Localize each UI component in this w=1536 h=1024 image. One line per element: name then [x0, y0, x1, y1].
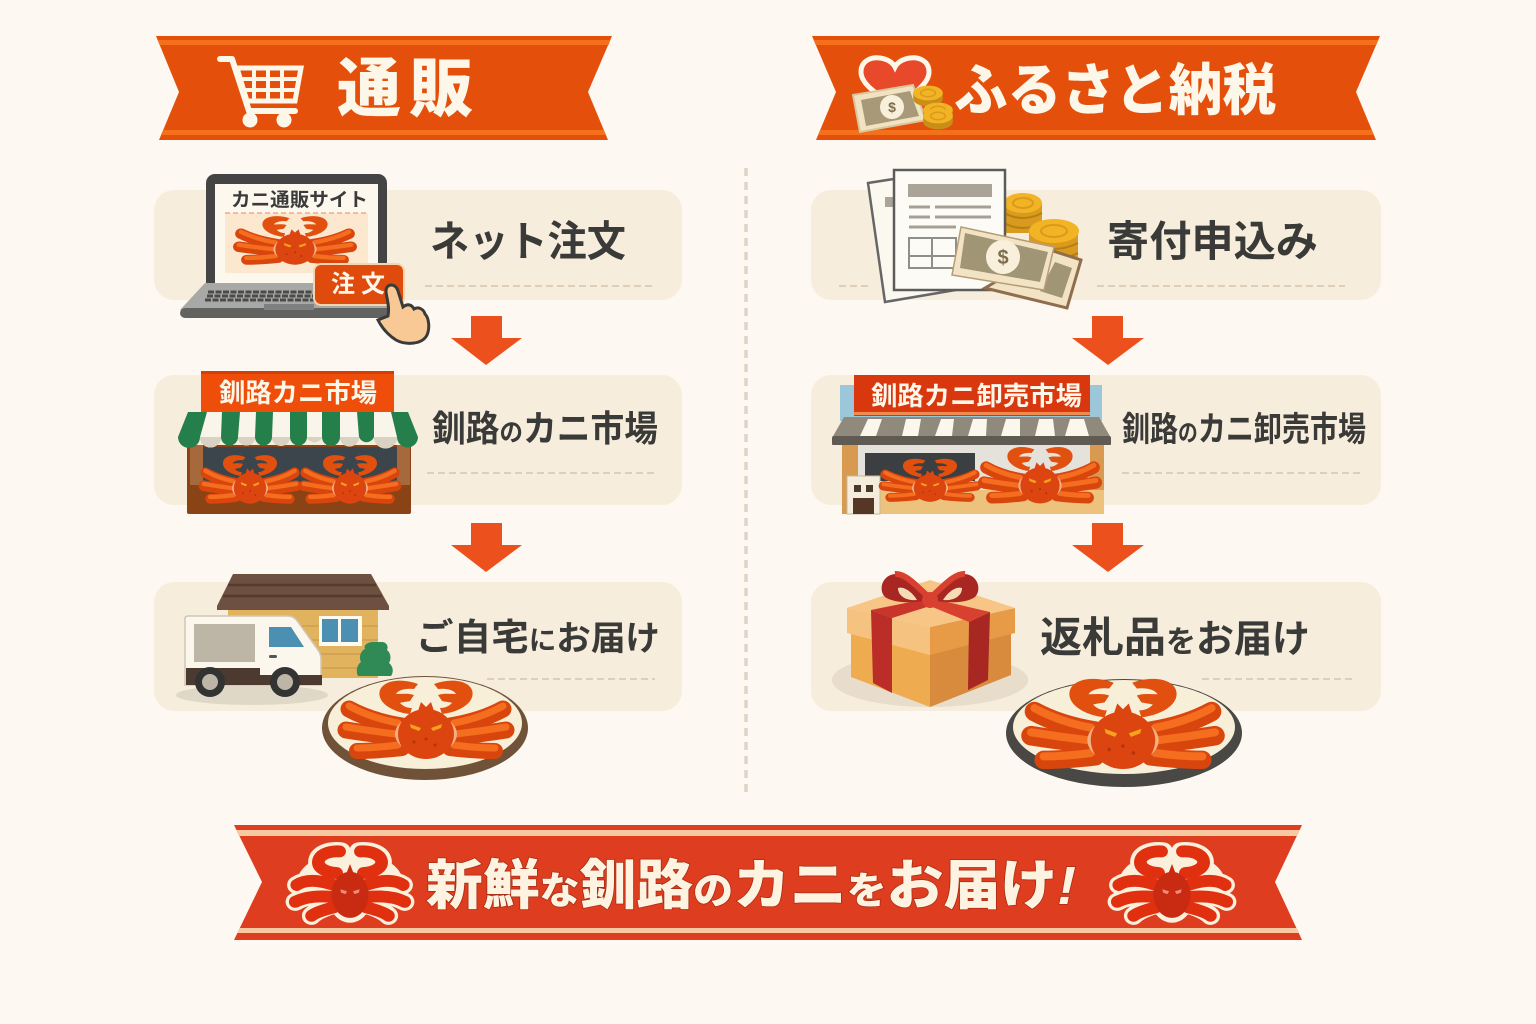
center divider — [744, 168, 748, 795]
icon: heart, money and coins: $ — [888, 99, 896, 115]
step text: donation application: 寄付申込み — [1107, 218, 1318, 265]
shop sign: 釧路カニ卸売市場 — [871, 381, 1082, 411]
panel: furusato step 3 — [811, 582, 1381, 711]
shop sign — [854, 375, 1090, 416]
panel: mail order step 3 — [154, 582, 682, 711]
icon: shopping cart — [220, 59, 301, 128]
heading text: mail order: 通販 — [337, 53, 481, 125]
grey striped awning — [832, 417, 1111, 445]
icon: heart, money and coins — [853, 58, 953, 132]
laptop screen title: カニ通販サイト — [231, 189, 368, 211]
arrow — [451, 523, 522, 572]
order button: 注文 — [331, 271, 391, 298]
panel: mail order step 1 — [154, 190, 682, 300]
step text: net order: ネット注文 — [430, 218, 626, 265]
step text: kushiro wholesale market: 釧路のカニ卸売市場 — [1122, 411, 1366, 449]
striped awning — [178, 412, 418, 448]
heading banner: mail order — [156, 36, 612, 140]
panel: mail order step 2 — [154, 375, 682, 505]
coin stacks — [1004, 193, 1079, 263]
illustration: delivery truck and house — [176, 574, 393, 705]
step text: return gift delivery: 返札品をお届け — [1040, 614, 1310, 661]
arrow — [1072, 523, 1144, 572]
heading banner: furusato nozei — [812, 36, 1380, 140]
illustration: crab on dark plate — [1006, 679, 1242, 787]
illustration: crab wholesale market shop — [832, 375, 1111, 514]
shop sign: 釧路カニ市場 — [219, 378, 377, 408]
arrow — [1072, 316, 1144, 365]
illustration: application documents and money: $ — [997, 247, 1009, 269]
panel: furusato step 1 — [811, 190, 1381, 300]
order button — [314, 264, 404, 305]
icon: pointing hand — [378, 285, 429, 343]
illustration: crab market shop — [178, 371, 418, 514]
step text: kushiro crab market: 釧路のカニ市場 — [432, 408, 658, 449]
step text: home delivery: ご自宅にお届け — [416, 617, 660, 658]
banner text: 新鮮な釧路のカニをお届け! — [426, 856, 1076, 916]
icon: crab left — [295, 851, 405, 923]
ribbon bow — [882, 574, 978, 608]
illustration: gift box — [832, 574, 1028, 707]
illustration: application documents and money — [868, 170, 1081, 308]
heading text: furusato nozei: ふるさと納税 — [954, 59, 1276, 122]
arrow — [451, 316, 522, 365]
bottom banner — [234, 825, 1302, 940]
illustration: crab on wooden plate — [322, 676, 528, 780]
shop sign — [201, 371, 394, 412]
panel: furusato step 2 — [811, 375, 1381, 505]
icon: crab right — [1117, 851, 1227, 923]
illustration: laptop ordering — [180, 174, 429, 343]
